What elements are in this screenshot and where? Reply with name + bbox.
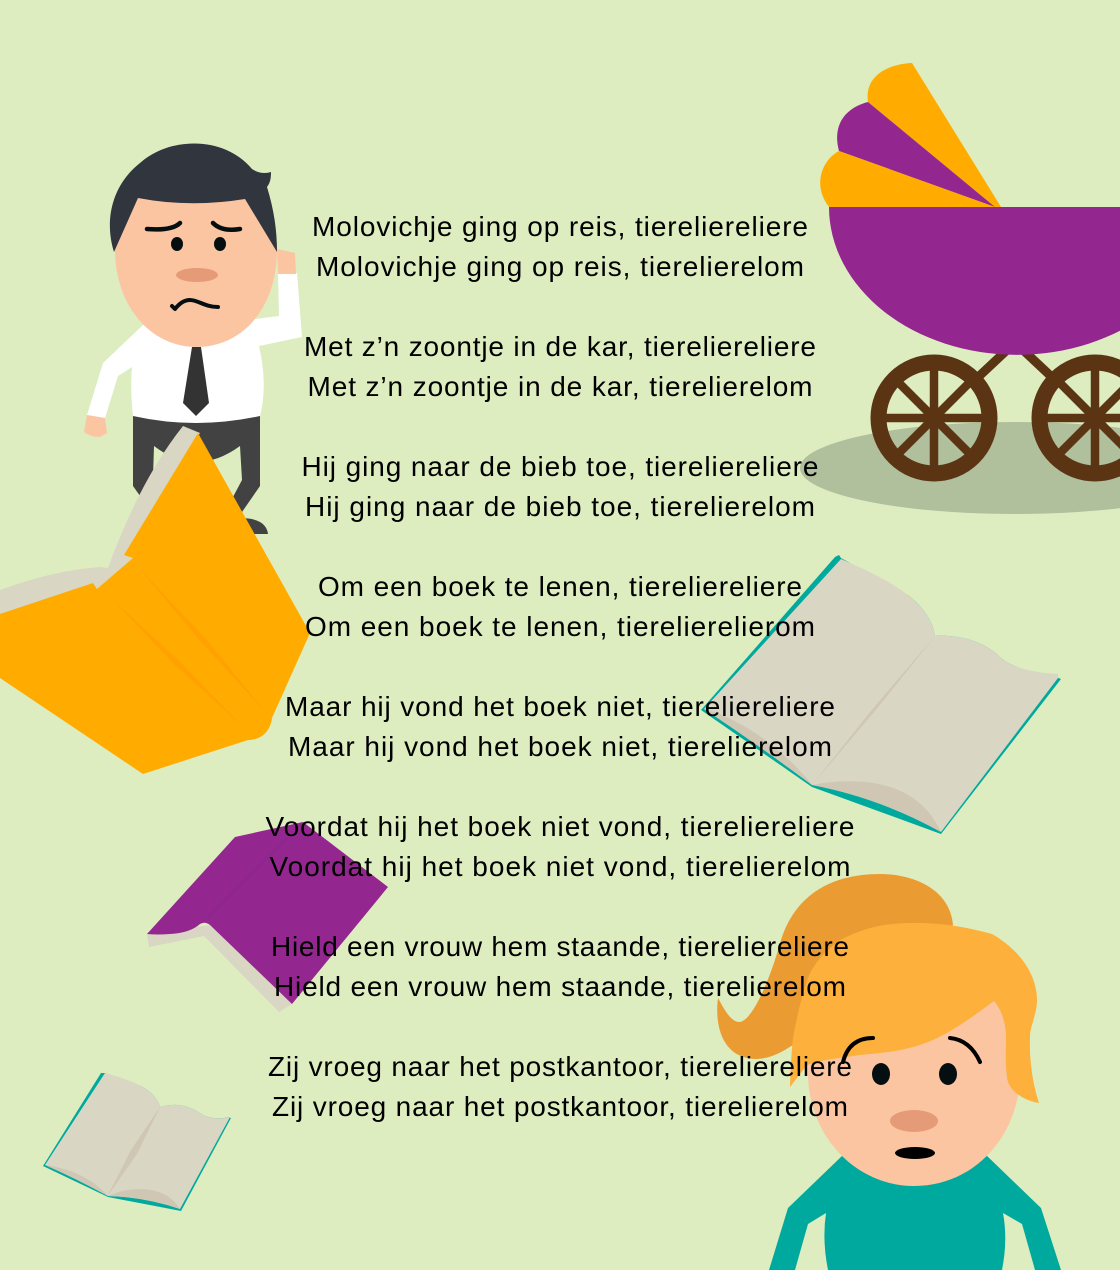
small book gap above right edge bbox=[105, 1068, 232, 1118]
stroller hood bbox=[820, 63, 1001, 207]
woman eyes bbox=[872, 1063, 957, 1085]
illustration: purple book bbox=[147, 822, 388, 1012]
verse 1: Molovichje ging op reis, tiereliereliere bbox=[312, 211, 808, 242]
small book crease bbox=[107, 1107, 160, 1197]
orange book cover bbox=[0, 433, 310, 774]
verse 1 bbox=[312, 211, 808, 282]
verse 2: Met z’n zoontje in de kar, tiereliereliere bbox=[304, 331, 816, 362]
verse 1: Molovichje ging op reis, tierelierelom bbox=[316, 251, 804, 282]
orange book pages bbox=[0, 426, 200, 616]
verse 6 bbox=[266, 811, 854, 882]
man eyes bbox=[171, 237, 226, 251]
purple book crease bbox=[207, 838, 287, 918]
illustration: large open book bbox=[701, 550, 1061, 834]
purple book pages bbox=[147, 925, 292, 1012]
verse 8: Zij vroeg naar het postkantoor, tiereliereliere bbox=[268, 1051, 852, 1082]
verse 6: Voordat hij het boek niet vond, tierelierelom bbox=[270, 851, 850, 882]
left wheel bbox=[878, 362, 990, 474]
woman mouth bbox=[895, 1147, 935, 1159]
large book spine crease bbox=[812, 636, 935, 785]
illustration: worried man bbox=[84, 143, 302, 534]
small book page shading bbox=[45, 1165, 180, 1209]
man shoe bbox=[240, 518, 268, 534]
verse 2 bbox=[304, 331, 816, 402]
stroller basket bbox=[829, 207, 1120, 355]
man mouth bbox=[172, 300, 218, 309]
illustration: baby stroller bbox=[800, 63, 1120, 514]
man shirt bbox=[87, 273, 302, 423]
right wheel bbox=[1040, 362, 1120, 474]
man hair bbox=[110, 143, 277, 252]
purple book cover bbox=[147, 822, 388, 1004]
small book pages bbox=[45, 1073, 230, 1209]
woman face bbox=[808, 950, 1020, 1186]
verse 6: Voordat hij het boek niet vond, tiereliereliere bbox=[266, 811, 854, 842]
woman top bbox=[769, 1155, 1061, 1270]
verse 3: Hij ging naar de bieb toe, tierelierelom bbox=[305, 491, 815, 522]
illustration: small open book bbox=[43, 1068, 232, 1211]
man face bbox=[115, 170, 277, 347]
woman eyebrows bbox=[843, 1038, 980, 1062]
illustration: orange book bbox=[0, 426, 310, 774]
verse 4 bbox=[305, 571, 815, 642]
verse 3: Hij ging naar de bieb toe, tiereliereliere bbox=[302, 451, 818, 482]
man trousers bbox=[133, 416, 260, 512]
man raised hand bbox=[277, 249, 296, 274]
verse 5: Maar hij vond het boek niet, tiereliereliere bbox=[285, 691, 835, 722]
verse 8: Zij vroeg naar het postkantoor, tierelierelom bbox=[272, 1091, 848, 1122]
stroller struts bbox=[975, 350, 1055, 380]
verse 7: Hield een vrouw hem staande, tierelierelom bbox=[274, 971, 846, 1002]
large book gap above right edge bbox=[841, 550, 1060, 676]
song lyrics bbox=[266, 211, 854, 1122]
man tie bbox=[183, 347, 209, 416]
woman hair bbox=[790, 923, 1039, 1103]
large book page shading bbox=[704, 709, 941, 832]
verse 5: Maar hij vond het boek niet, tierelierelom bbox=[288, 731, 832, 762]
large book cover bbox=[701, 555, 1061, 834]
man lower hand bbox=[84, 415, 107, 437]
verse 7: Hield een vrouw hem staande, tiereliereliere bbox=[271, 931, 849, 962]
verse 3 bbox=[302, 451, 818, 522]
small book cover bbox=[43, 1073, 231, 1211]
verse 4: Om een boek te lenen, tiereliereliere bbox=[318, 571, 802, 602]
verse 2: Met z’n zoontje in de kar, tierelierelom bbox=[308, 371, 812, 402]
stroller ground shadow bbox=[800, 422, 1120, 514]
verse 4: Om een boek te lenen, tierelierelierom bbox=[305, 611, 815, 642]
verse 8 bbox=[268, 1051, 852, 1122]
orange book creases bbox=[111, 567, 268, 727]
man eyebrows bbox=[147, 223, 240, 230]
woman ponytail bbox=[717, 874, 953, 1059]
woman nose bbox=[890, 1110, 938, 1132]
verse 7 bbox=[271, 931, 849, 1002]
large book pages bbox=[704, 559, 1058, 832]
verse 5 bbox=[285, 691, 835, 762]
illustration: surprised woman bbox=[717, 874, 1061, 1270]
man nose bbox=[176, 268, 218, 282]
